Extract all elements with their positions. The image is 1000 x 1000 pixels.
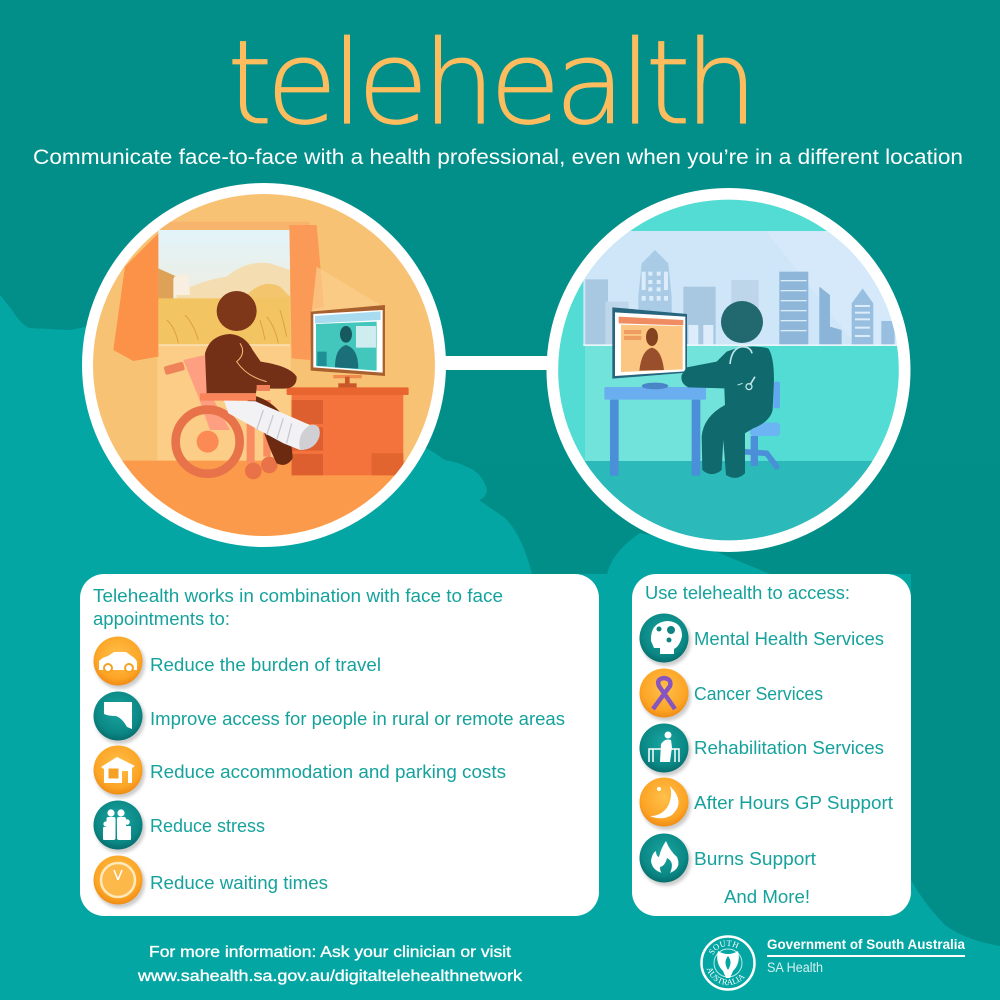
connector between circles [440,356,552,370]
item: burns [640,834,816,886]
item: mental health: Mental Health Services [694,629,884,649]
item: cancer: Cancer Services [694,684,823,704]
desk [287,387,409,475]
skyline [585,250,895,345]
panel heading: Telehealth works in combination with face to face [93,586,503,606]
item: mental health [640,614,884,666]
footer text: www.sahealth.sa.gov.au/digitaltelehealthnetwork [137,968,522,985]
patient [200,291,320,465]
wheelchair [164,355,278,479]
panel heading: Use telehealth to access: [645,583,850,603]
logo: South Australia crest: AUSTRALIA [706,968,745,986]
item: burns: Burns Support [694,849,816,869]
footer text: For more information: Ask your clinician or visit [149,944,512,961]
panel: services [632,574,911,916]
monitor [612,307,687,379]
panel: telehealth benefits: appointments to: [93,609,230,629]
item: rural access: Improve access for people in rural or remote areas [150,709,565,729]
item: cancer [640,668,823,721]
item: after hours [640,778,893,830]
monitor [311,305,385,388]
item: waiting times [94,856,328,908]
item: rehabilitation: Rehabilitation Services [694,738,884,758]
subtitle: Communicate face-to-face with a health professional, even when you’re in a different location [33,146,963,169]
desk [604,383,706,476]
item: reduce travel: Reduce the burden of travel [150,655,381,675]
panel: telehealth benefits [80,574,599,916]
item: waiting times: Reduce waiting times [150,873,328,893]
item: reduce travel [94,636,381,689]
item: accommodation [94,746,506,798]
item: after hours: After Hours GP Support [694,793,893,813]
title: telehealth [227,16,758,151]
item: rehabilitation [640,724,884,776]
logo text: Government of South Australia [767,937,965,975]
clinician [681,301,774,478]
logo: South Australia crest: SOUTH [709,940,740,955]
item: accommodation: Reduce accommodation and parking costs [150,762,506,782]
logo text: Government of South Australia: Government of South Australia [767,937,965,952]
item: stress [94,800,265,853]
chair [743,382,780,467]
logo text: Government of South Australia: SA Health [767,960,823,975]
logo: South Australia crest [700,935,756,991]
footer text [137,944,522,985]
item: rural access [94,692,565,744]
and more: And More! [724,887,810,907]
illustration: clinician in city office [546,188,910,552]
illustration: patient at home in wheelchair [82,183,446,547]
item: stress: Reduce stress [150,816,265,836]
